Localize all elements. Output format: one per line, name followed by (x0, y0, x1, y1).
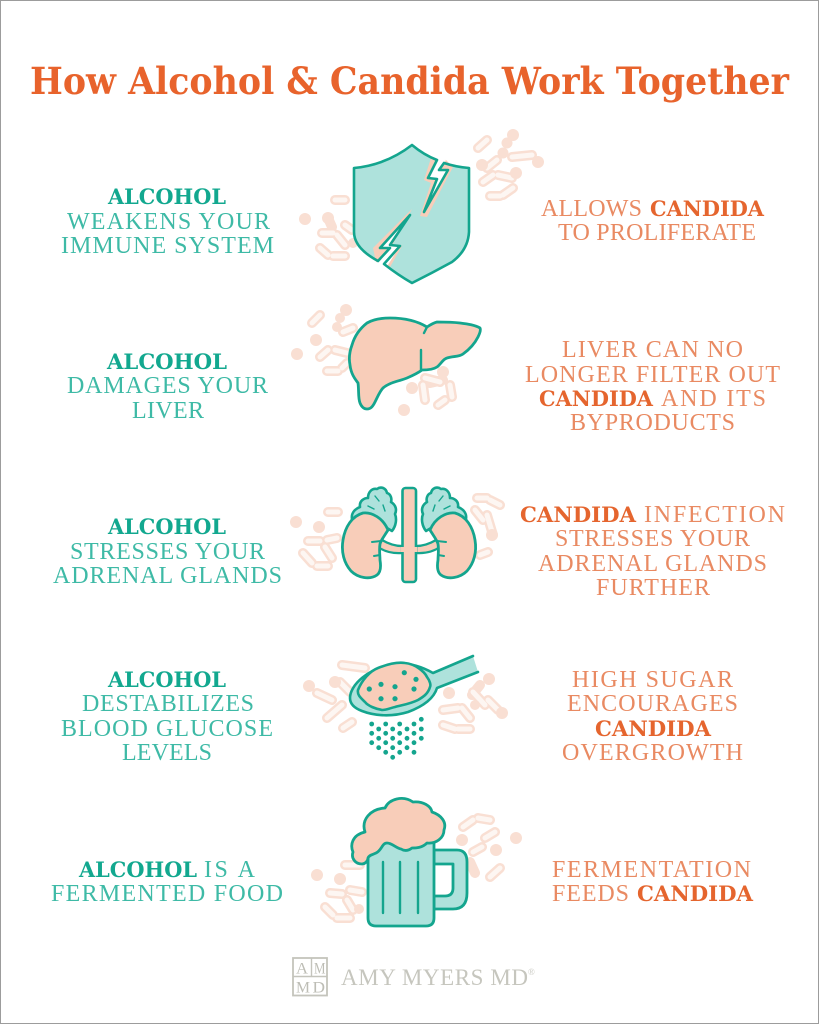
left text: alcohol stresses your adrenal glands (53, 515, 282, 589)
right text: liver can no longer filter out candida: AND ITS (661, 386, 766, 412)
row 2: liver (67, 304, 780, 436)
right text: candida infection stresses adrenal glands further: CANDIDA (520, 503, 636, 528)
left text: alcohol damages your liver: DAMAGES YOUR (67, 373, 268, 399)
right text: liver can no longer filter out candida: BYPRODUCTS (570, 410, 735, 436)
left text: alcohol stresses your adrenal glands: ADRENAL GLANDS (53, 563, 282, 589)
candida cells around shield (299, 129, 544, 256)
row 3: adrenal glands (53, 488, 785, 601)
icon: beer mug with foam (352, 798, 467, 926)
right text: high sugar encourages candida overgrowth: ENCOURAGES (567, 691, 738, 717)
left text: alcohol destabilizes blood glucose levels: LEVELS (122, 740, 212, 766)
left text: alcohol damages your liver: ALCOHOL (106, 350, 227, 375)
left text: alcohol is a fermented food: FERMENTED FOOD (51, 881, 283, 907)
right text: high sugar encourages candida overgrowth (562, 667, 743, 766)
left text: alcohol weakens your immune system: ALCOHOL (107, 185, 226, 210)
left text: alcohol damages your liver (67, 350, 268, 424)
right text: candida infection stresses adrenal glands further (520, 502, 785, 601)
left text: alcohol is a fermented food: IS A (204, 857, 256, 883)
right text: liver can no longer filter out candida: CANDIDA (539, 387, 653, 412)
row 5: fermented food (51, 798, 753, 926)
registered mark: ® (528, 967, 535, 977)
candida cells around liver (291, 304, 452, 416)
left text: alcohol is a fermented food (51, 857, 283, 907)
candida cells around spoon (303, 665, 508, 729)
icon: cracked shield (354, 145, 469, 283)
right text: candida infection stresses adrenal glands further: FURTHER (596, 575, 710, 601)
logo box monogram: A (296, 960, 308, 978)
left text: alcohol weakens your immune system: IMMUNE SYSTEM (61, 233, 274, 259)
right text: liver can no longer filter out candida: LIVER CAN NO (562, 337, 743, 363)
logo box monogram: M (296, 980, 310, 996)
left text: alcohol destabilizes blood glucose levels: BLOOD GLUCOSE (61, 716, 273, 742)
title: How Alcohol & Candida Work Together (30, 59, 789, 103)
row 1: immune system (61, 129, 764, 283)
right text: fermentation feeds candida (552, 857, 753, 907)
right text: high sugar encourages candida overgrowth: HIGH SUGAR (572, 667, 733, 693)
right text: allows candida to proliferate: ALLOWS (541, 196, 642, 222)
right text: fermentation feeds candida: FERMENTATION (552, 857, 751, 883)
row 4: blood glucose (61, 656, 743, 766)
candida cells around beer mug (311, 818, 522, 918)
right text: allows candida to proliferate: TO PROLIFERATE (558, 220, 756, 246)
left text: alcohol destabilizes blood glucose levels: ALCOHOL (107, 668, 226, 693)
logo box monogram: D (312, 980, 325, 996)
left text: alcohol weakens your immune system: WEAKENS YOUR (67, 209, 270, 235)
left text: alcohol destabilizes blood glucose levels (61, 668, 273, 766)
right text: fermentation feeds candida: CANDIDA (637, 882, 753, 907)
logo box monogram (293, 958, 327, 996)
left text: alcohol damages your liver: LIVER (132, 398, 204, 424)
left text: alcohol is a fermented food: ALCOHOL (78, 858, 197, 883)
icon: falling sugar dots (369, 717, 424, 760)
right text: high sugar encourages candida overgrowth: CANDIDA (595, 717, 711, 742)
footer logo: Amy Myers MD (293, 958, 535, 996)
right text: allows candida to proliferate (541, 196, 764, 246)
right text: high sugar encourages candida overgrowth: OVERGROWTH (562, 740, 743, 766)
logo wordmark: AMY MYERS MD (341, 965, 528, 990)
right text: candida infection stresses adrenal glands further: INFECTION (644, 502, 785, 528)
right text: liver can no longer filter out candida (525, 337, 780, 436)
left text: alcohol destabilizes blood glucose levels: DESTABILIZES (82, 691, 254, 717)
right text: fermentation feeds candida: FEEDS (552, 881, 629, 907)
left text: alcohol weakens your immune system (61, 185, 274, 259)
icon: spoon of sugar (350, 656, 478, 715)
icon: liver (349, 318, 480, 409)
right text: candida infection stresses adrenal glands further: STRESSES YOUR (555, 526, 750, 552)
right text: allows candida to proliferate: CANDIDA (650, 197, 764, 222)
candida cells around kidneys (290, 498, 500, 566)
logo box monogram: M (314, 960, 326, 978)
left text: alcohol stresses your adrenal glands: STRESSES YOUR (70, 539, 265, 565)
icon: kidneys and adrenal glands (342, 488, 476, 582)
left text: alcohol stresses your adrenal glands: ALCOHOL (107, 515, 226, 540)
right text: liver can no longer filter out candida: LONGER FILTER OUT (525, 362, 780, 388)
right text: candida infection stresses adrenal glands further: ADRENAL GLANDS (538, 551, 767, 577)
